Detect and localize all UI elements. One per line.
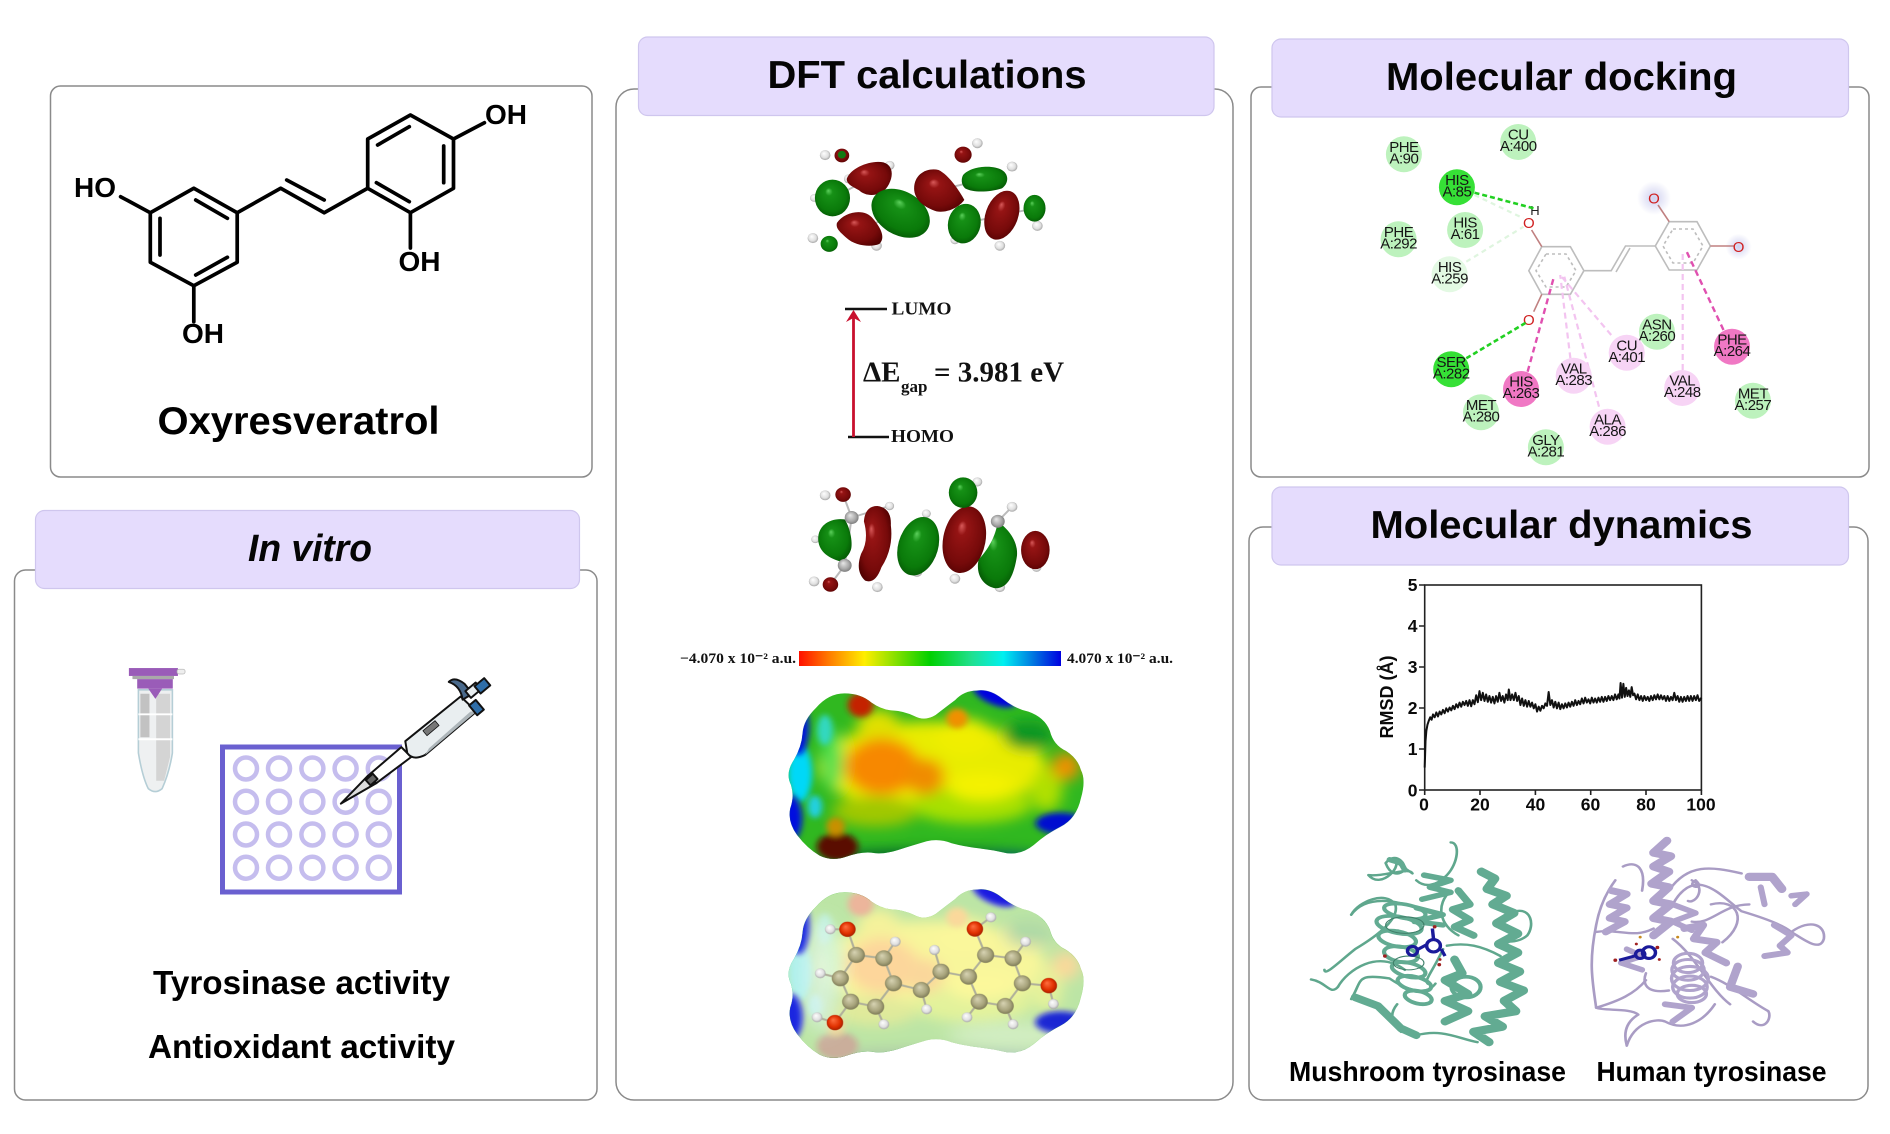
residues: PHE (1389, 139, 1419, 156)
residues: A:263 (1503, 385, 1540, 402)
y axis tick labels: 5 (1408, 575, 1418, 595)
text: antioxidant activity: Antioxidant activity (148, 1029, 455, 1066)
heading: molecular dynamics: Molecular dynamics (1370, 504, 1752, 547)
y axis tick labels (1408, 575, 1418, 800)
residues: A:248 (1664, 384, 1701, 401)
energy gap diagram (845, 298, 1064, 446)
human tyrosinase ribbon structure (1592, 841, 1824, 1046)
residues: A:401 (1608, 349, 1645, 366)
x axis tick labels: 20 (1470, 794, 1490, 814)
panel: oxyresveratrol (50, 86, 592, 477)
residues: CU (1508, 126, 1529, 144)
colour scale legend (680, 651, 1173, 667)
panel: DFT calculations (616, 37, 1233, 1100)
energy gap diagram: HOMO (891, 426, 954, 446)
panel: molecular docking (1251, 39, 1869, 477)
electrostatic potential map with atoms (788, 889, 1084, 1058)
RMSD line chart (1377, 575, 1716, 814)
x axis tick labels: 100 (1686, 794, 1716, 814)
residues: A:282 (1433, 366, 1470, 382)
residues: A:259 (1431, 270, 1468, 288)
residues: A:400 (1500, 138, 1537, 155)
residues: A:260 (1639, 328, 1675, 345)
compound name: Oxyresveratrol (158, 400, 440, 443)
RMSD trace (1425, 683, 1701, 768)
residues: MET (1466, 397, 1496, 414)
energy gap diagram: ΔE (863, 356, 901, 388)
residues: HIS (1438, 259, 1462, 276)
ligand skeleton: O (1523, 312, 1535, 329)
residues: A:292 (1380, 236, 1417, 252)
residues: VAL (1561, 360, 1587, 378)
y axis tick labels: 0 (1408, 780, 1418, 800)
ligand skeleton: O (1523, 215, 1535, 232)
residues: SER (1437, 354, 1467, 371)
residues: A:281 (1528, 444, 1564, 460)
residues: HIS (1509, 374, 1533, 390)
energy gap diagram: = 3.981 eV (934, 356, 1064, 388)
chemical structure of oxyresveratrol: OH (398, 246, 440, 277)
y axis tick labels: 1 (1408, 739, 1418, 759)
x axis tick labels: 40 (1526, 794, 1545, 814)
heading: molecular dynamics (1272, 487, 1848, 565)
residues: A:280 (1463, 408, 1500, 426)
chemical structure of oxyresveratrol: HO (74, 172, 116, 203)
chemical structure of oxyresveratrol (74, 99, 527, 349)
residues: PHE (1384, 224, 1414, 241)
residues: HIS (1453, 214, 1477, 232)
heading: DFT calculations (638, 37, 1214, 116)
ligand skeleton: H (1530, 203, 1540, 218)
residues: ALA (1594, 412, 1622, 428)
colour scale legend: 4.070 x 10⁻² a.u. (1067, 651, 1173, 667)
residues: VAL (1669, 372, 1695, 390)
docking interaction diagram (1380, 124, 1771, 465)
heading: molecular docking: Molecular docking (1386, 56, 1737, 99)
chemical structure of oxyresveratrol: OH (485, 99, 527, 130)
chemical structure of oxyresveratrol: OH (182, 318, 224, 349)
residues: A:264 (1714, 343, 1751, 360)
residues: A:286 (1589, 423, 1626, 440)
icon: micropipette (341, 678, 490, 804)
ligand skeleton (1523, 181, 1752, 329)
panel: in vitro (14, 510, 597, 1100)
panel: molecular dynamics (1249, 487, 1868, 1100)
energy gap diagram: LUMO (892, 298, 952, 318)
energy gap diagram: gap (901, 377, 927, 396)
residues: HIS (1445, 172, 1469, 189)
x axis tick labels: 80 (1636, 794, 1656, 814)
x axis tick labels: 0 (1419, 794, 1429, 814)
y axis title: RMSD (Å) (1377, 656, 1397, 738)
LUMO orbital (808, 138, 1046, 252)
colour scale legend: −4.070 x 10⁻² a.u. (680, 651, 796, 667)
text: tyrosinase activity: Tyrosinase activity (153, 965, 450, 1002)
y axis tick labels: 4 (1408, 616, 1418, 636)
residues: A:85 (1442, 184, 1471, 200)
residues: CU (1616, 338, 1637, 354)
residues: PHE (1717, 332, 1747, 348)
residues: A:283 (1555, 372, 1592, 389)
x axis tick labels: 60 (1581, 794, 1600, 814)
residues: MET (1738, 386, 1768, 402)
interaction bonds (1466, 193, 1724, 407)
icon: microcentrifuge tube (129, 668, 185, 792)
y axis tick labels: 3 (1408, 657, 1418, 677)
heading: in vitro: In vitro (248, 528, 372, 570)
icon: well plate (222, 747, 400, 892)
label: human tyrosinase: Human tyrosinase (1596, 1056, 1826, 1087)
heading: molecular docking (1272, 39, 1848, 117)
ligand skeleton: O (1733, 239, 1744, 256)
label: mushroom tyrosinase: Mushroom tyrosinase (1289, 1056, 1566, 1087)
heading: in vitro (36, 510, 580, 588)
residues: ASN (1642, 316, 1672, 334)
heading: DFT calculations: DFT calculations (768, 54, 1086, 97)
ligand skeleton: O (1648, 190, 1660, 208)
residues: GLY (1532, 432, 1560, 449)
residues: A:61 (1451, 226, 1480, 243)
residues: A:257 (1735, 397, 1771, 414)
electrostatic potential surface (788, 690, 1084, 859)
mushroom tyrosinase ribbon structure (1311, 842, 1531, 1042)
x axis tick labels (1419, 794, 1716, 814)
residues: A:90 (1389, 150, 1418, 168)
y axis tick labels: 2 (1408, 698, 1418, 718)
residues (1380, 124, 1771, 465)
HOMO orbital (809, 477, 1050, 592)
